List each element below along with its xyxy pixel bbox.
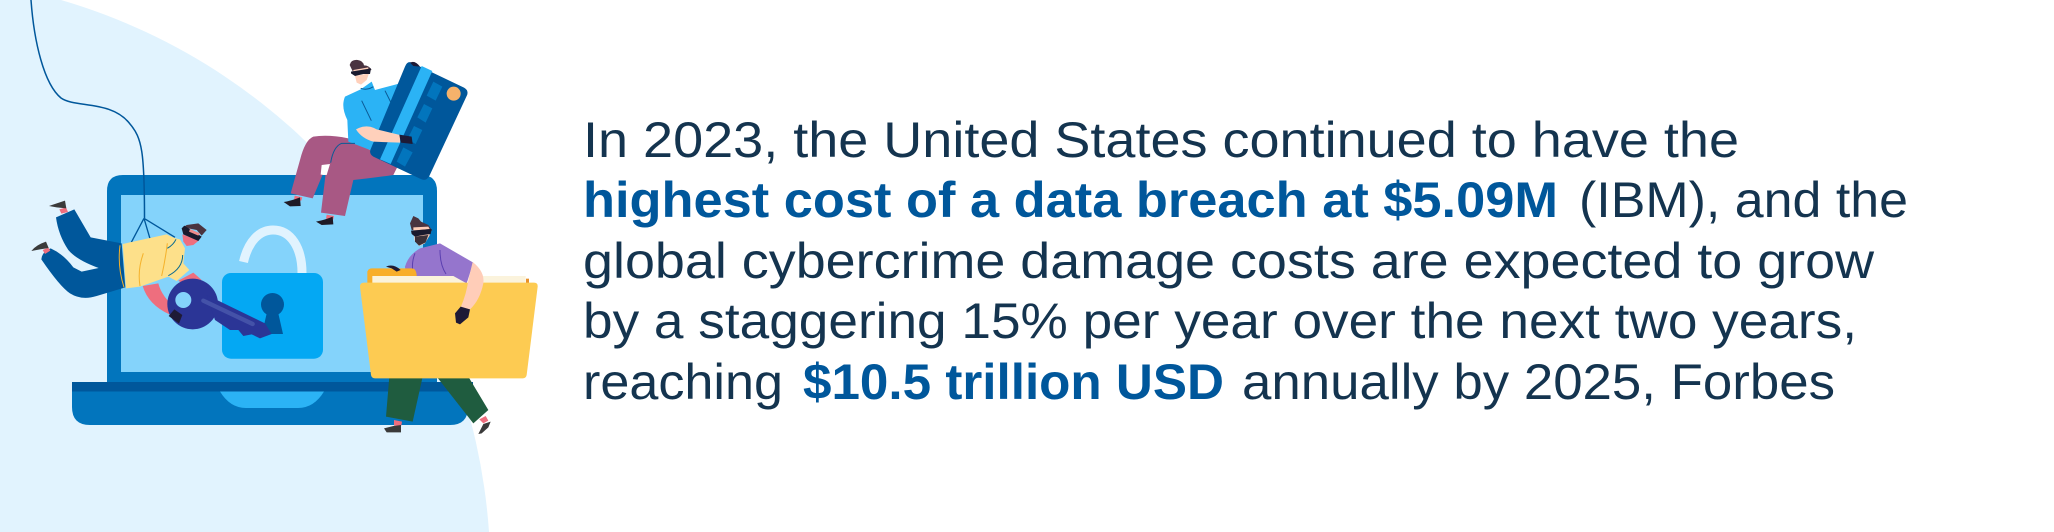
hacker hanging with key <box>31 201 272 338</box>
hacker sitting with credit card <box>284 60 468 225</box>
line 5 remainder: annually by 2025, Forbes <box>1242 354 1835 410</box>
hacker carrying folder <box>360 216 538 434</box>
line 1: In 2023, the United States continued to have the <box>583 112 1739 168</box>
line 4: by a staggering 15% per year over the next two years, <box>583 293 1857 349</box>
background circle <box>0 0 489 532</box>
text block <box>583 112 1908 410</box>
line 2 remainder: (IBM), and the <box>1579 172 1908 228</box>
padlock <box>222 230 323 359</box>
line 3: global cybercrime damage costs are expected to grow <box>583 233 1875 289</box>
line 2 bold highlight: highest cost of a data breach at $5.09M <box>583 172 1558 228</box>
hanging wire <box>31 0 144 218</box>
illustration: hackers breaking into a laptop <box>31 0 538 434</box>
laptop <box>72 175 473 425</box>
line 5 start: reaching <box>583 354 783 410</box>
line 5 bold highlight: $10.5 trillion USD <box>803 354 1224 410</box>
